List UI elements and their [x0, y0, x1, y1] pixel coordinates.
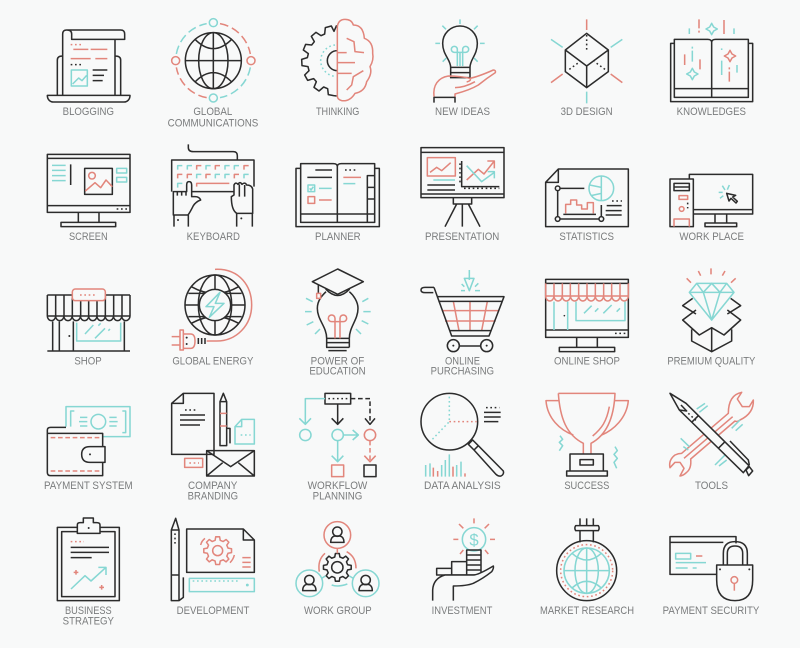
- label: global energy: GLOBAL ENERGY: [172, 355, 253, 367]
- people around gear: [296, 522, 379, 597]
- icon: global energy: [172, 269, 253, 367]
- icon: payment system: [44, 407, 133, 492]
- trophy: [546, 393, 628, 476]
- icon: global communications: [168, 19, 258, 130]
- label: new ideas: NEW IDEAS: [435, 106, 490, 118]
- label: business strategy: BUSINESS: [65, 605, 112, 617]
- blogging laptop and page: [47, 30, 130, 102]
- label: global communications: COMMUNICATIONS: [168, 118, 258, 130]
- globe with orbit: [172, 19, 255, 102]
- label: 3d design: 3D DESIGN: [561, 106, 613, 118]
- label: company branding: BRANDING: [188, 491, 238, 503]
- graduation cap bulb: [305, 269, 371, 351]
- credit card and padlock: [670, 537, 753, 601]
- icon: investment: [432, 518, 495, 617]
- label: online purchasing: [431, 355, 494, 378]
- globe with plug: [172, 269, 252, 350]
- stationery set: [172, 393, 254, 476]
- label: thinking: THINKING: [316, 106, 359, 118]
- label: online purchasing: PURCHASING: [431, 366, 494, 378]
- open book with sparkles: [671, 19, 753, 102]
- label: workflow planning: WORKFLOW: [308, 480, 368, 492]
- label: premium quality: PREMIUM QUALITY: [667, 355, 755, 367]
- label: online shop: ONLINE SHOP: [554, 355, 620, 367]
- label: workflow planning: [308, 480, 368, 503]
- document with charts: [546, 169, 628, 227]
- icon: blogging: [47, 30, 130, 118]
- icon: premium quality: [667, 268, 755, 367]
- label: business strategy: [63, 605, 114, 628]
- label: company branding: COMPANY: [188, 480, 237, 492]
- label: blogging: BLOGGING: [63, 106, 114, 118]
- icon: 3d design: [551, 19, 622, 118]
- icon: thinking: [302, 19, 373, 118]
- diamond over box: [683, 268, 741, 352]
- storefront: [47, 289, 130, 351]
- label: keyboard: KEYBOARD: [187, 231, 240, 243]
- label: screen: SCREEN: [69, 231, 108, 243]
- label: development: DEVELOPMENT: [177, 605, 250, 617]
- label: data analysis: DATA ANALYSIS: [424, 480, 501, 492]
- icon: shop: [47, 289, 130, 367]
- icon: presentation: [421, 148, 504, 243]
- flow diagram: [299, 393, 376, 477]
- label: payment system: PAYMENT SYSTEM: [44, 480, 133, 492]
- label: investment: INVESTMENT: [432, 605, 493, 617]
- icon: work place: [670, 174, 753, 243]
- gear and brain: [302, 19, 373, 101]
- magnifier with bars: [421, 393, 504, 477]
- icon: statistics: [546, 169, 628, 243]
- label: payment security: PAYMENT SECURITY: [663, 605, 759, 617]
- crossed pencil and wrench: [670, 392, 753, 476]
- label: power of education: POWER OF: [311, 355, 365, 367]
- label: power of education: EDUCATION: [309, 366, 366, 378]
- label: success: SUCCESS: [564, 480, 609, 492]
- label: workflow planning: PLANNING: [313, 491, 362, 503]
- icon: workflow planning: [299, 393, 376, 503]
- icon: success: [546, 393, 628, 492]
- label: market research: MARKET RESEARCH: [540, 605, 634, 617]
- icon: work group: [296, 522, 379, 617]
- label: power of education: [309, 355, 366, 378]
- icon: keyboard: [172, 144, 254, 243]
- label: online purchasing: ONLINE: [445, 355, 480, 367]
- flask with globe: [557, 518, 617, 601]
- board on tripod: [421, 148, 504, 227]
- label: company branding: [188, 480, 238, 503]
- label: tools: TOOLS: [695, 480, 728, 492]
- icon: business strategy: [57, 518, 119, 628]
- label: statistics: STATISTICS: [559, 231, 614, 243]
- icon: company branding: [172, 393, 254, 503]
- label: knowledges: KNOWLEDGES: [677, 106, 746, 118]
- icon: payment security: [663, 537, 759, 617]
- label: planner: PLANNER: [315, 231, 361, 243]
- icon: development: [171, 518, 254, 617]
- icon: market research: [540, 518, 634, 617]
- label: presentation: PRESENTATION: [425, 231, 499, 243]
- monitor: [47, 154, 130, 227]
- cube with rays: [551, 19, 622, 103]
- label: shop: SHOP: [74, 355, 102, 367]
- monitor with store: [546, 279, 628, 352]
- clipboard: [57, 518, 119, 601]
- open planner: [296, 164, 379, 227]
- shopping cart: [421, 270, 504, 352]
- dollar sign: $: [469, 530, 479, 549]
- icon: screen: [47, 154, 130, 243]
- icon: new ideas: [434, 19, 495, 118]
- label: global communications: [168, 106, 258, 130]
- wallet and banknote: [47, 407, 130, 476]
- icon: knowledges: [671, 19, 753, 118]
- label: global communications: GLOBAL: [193, 106, 232, 118]
- icon: online shop: [546, 279, 628, 367]
- icon: data analysis: [421, 393, 504, 492]
- icon: planner: [296, 164, 379, 243]
- icon: tools: [670, 392, 753, 492]
- tower and monitor: [670, 174, 753, 227]
- bulb over hand: [434, 19, 495, 103]
- keyboard and hands: [172, 144, 254, 227]
- label: business strategy: STRATEGY: [63, 616, 114, 628]
- label: work place: WORK PLACE: [679, 231, 744, 243]
- pencil, blueprint and ruler: [171, 518, 254, 601]
- icon: power of education: [305, 269, 371, 378]
- label: work group: WORK GROUP: [304, 605, 372, 617]
- icon: online purchasing: [421, 270, 504, 378]
